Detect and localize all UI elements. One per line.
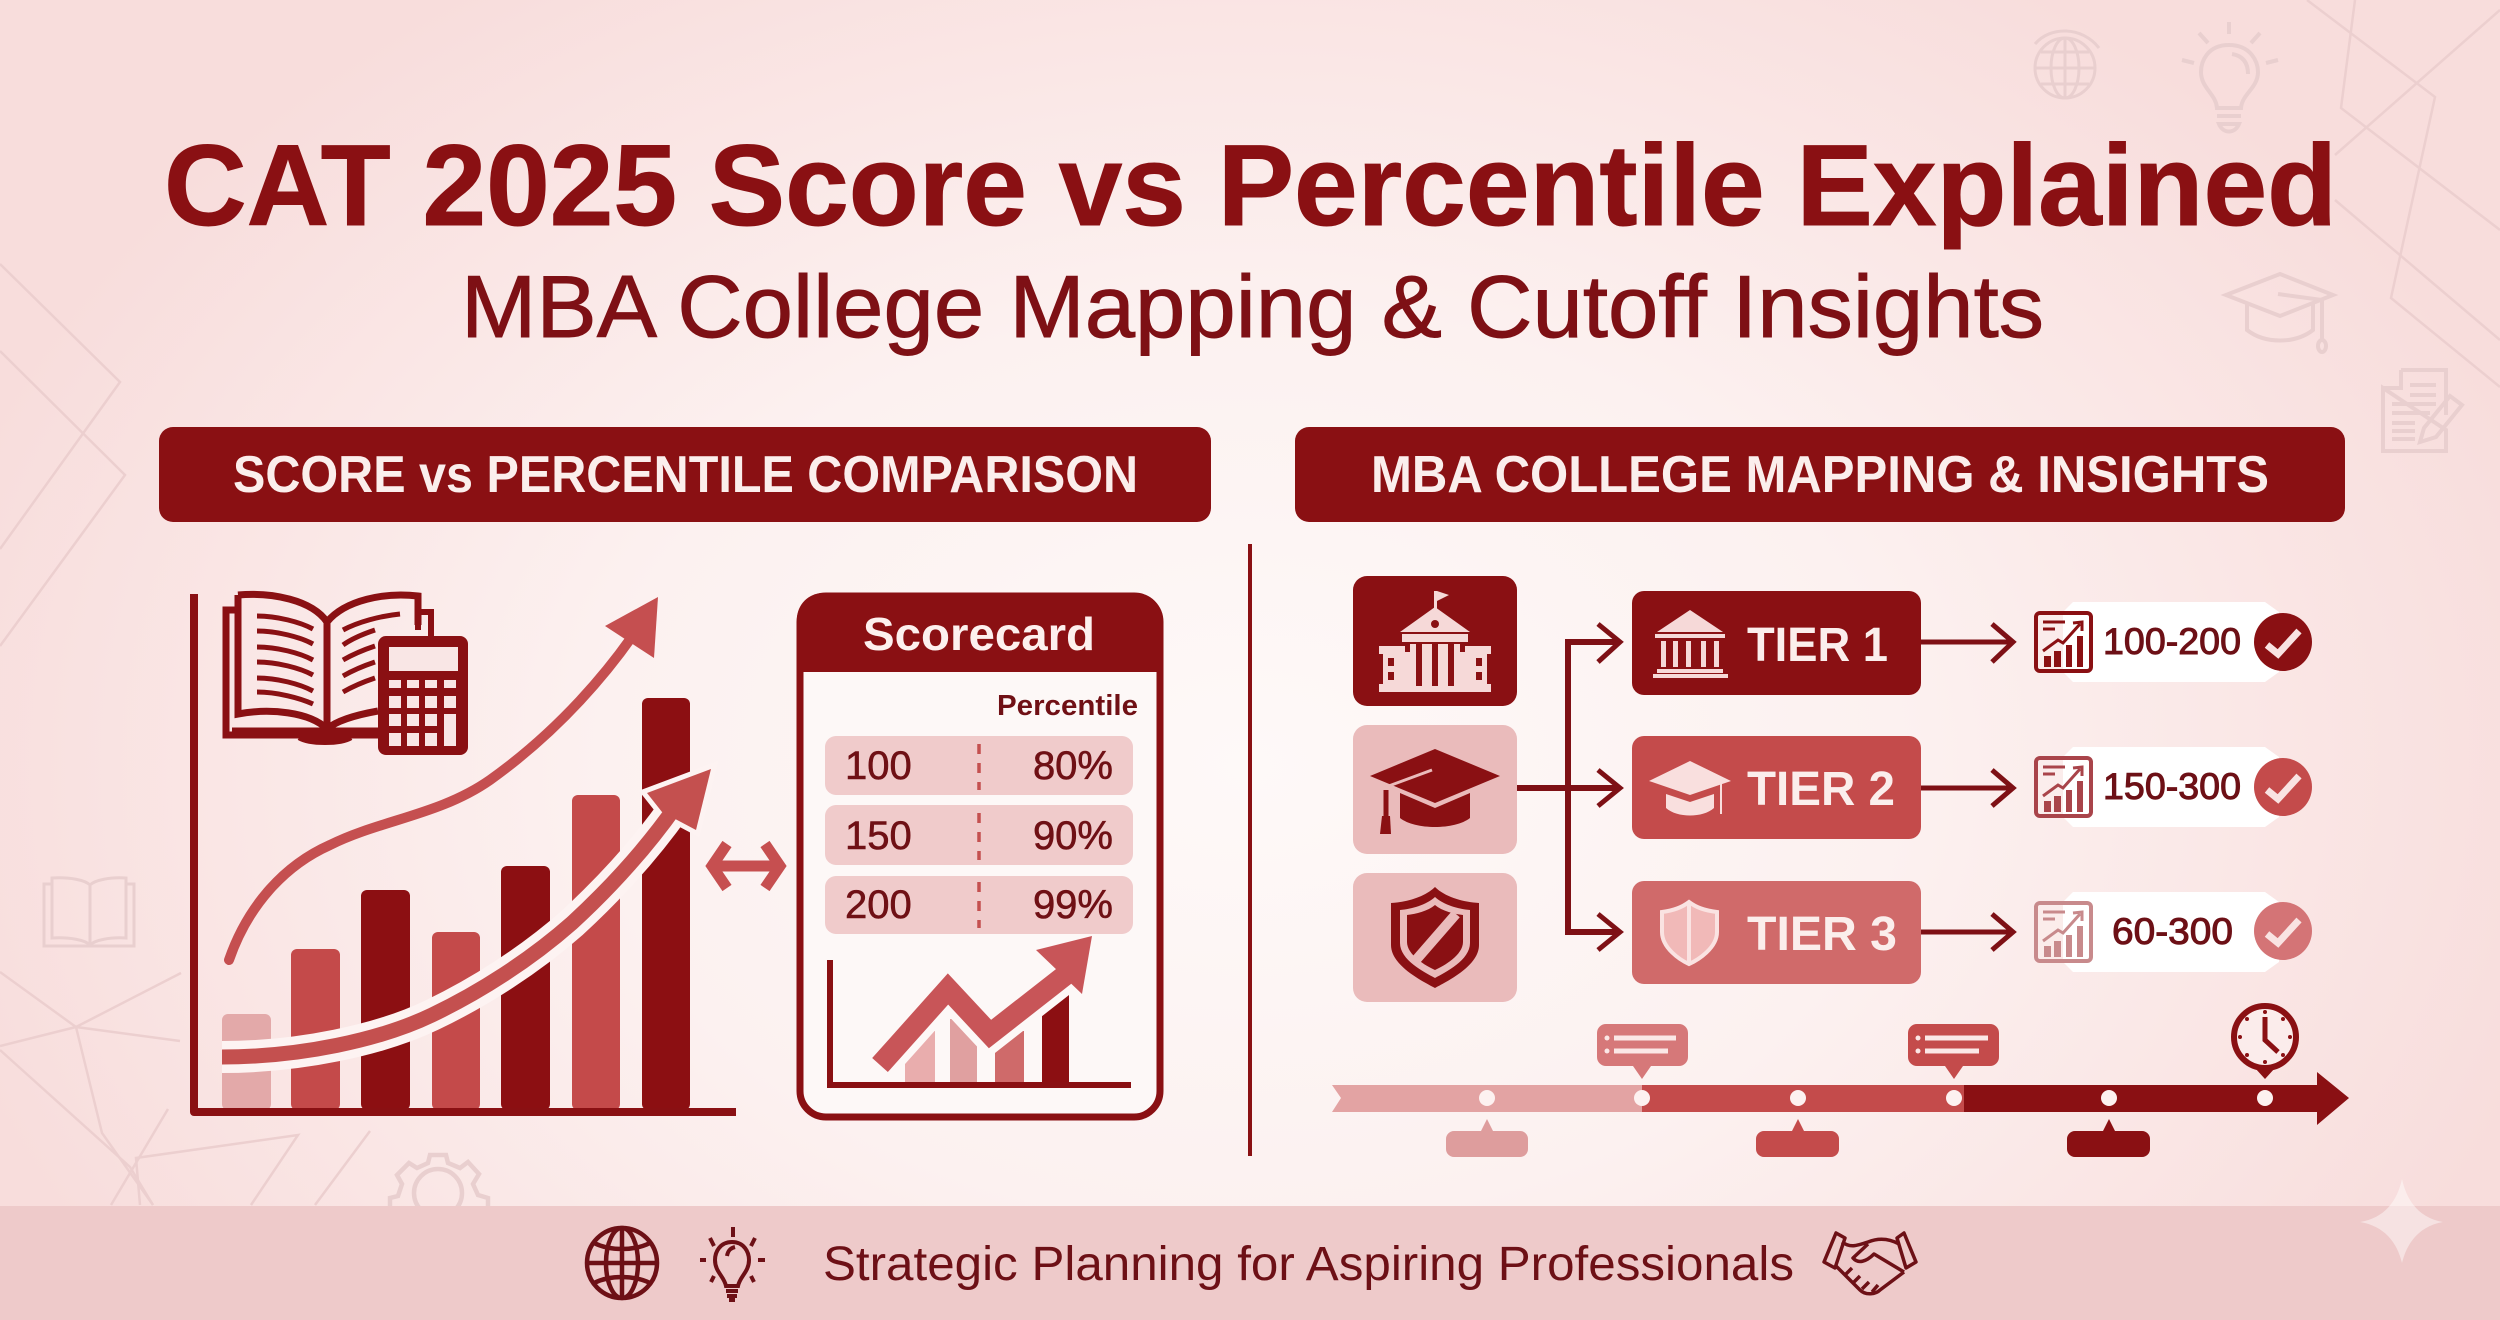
range row: tier 2: 150-300 <box>2103 766 2241 807</box>
timeline marker: dark lower <box>2067 1119 2150 1157</box>
icon tile: graduation cap <box>1353 725 1517 854</box>
mini trend chart <box>830 936 1131 1085</box>
faint icon: open book <box>44 878 134 946</box>
bar chart <box>222 698 690 1110</box>
row: 150 to 90%: 150 <box>845 814 912 858</box>
decorative sparkle <box>2360 1179 2443 1263</box>
timeline callout: mid upper <box>1908 1024 1999 1079</box>
icon: handshake <box>1824 1233 1916 1294</box>
row: 200 to 99%: 99% <box>1033 883 1113 927</box>
icon: check <box>2254 613 2312 671</box>
icon: open book <box>226 594 431 740</box>
column label: Percentile <box>997 690 1138 722</box>
range row: tier 2 <box>2036 747 2312 827</box>
icon: footer globe <box>587 1228 657 1298</box>
faint icon: globe <box>2035 31 2099 98</box>
arrow: double-headed comparison <box>712 844 780 888</box>
faint icon: document with pencil <box>2383 370 2462 451</box>
panel: MBA college mapping <box>1353 576 2312 1002</box>
tier 2 box <box>1632 736 1921 839</box>
icon: bank <box>1653 610 1728 678</box>
timeline arrow <box>1332 1072 2349 1125</box>
row: 150 to 90% <box>825 805 1133 865</box>
scorecard header <box>797 593 1162 672</box>
timeline marker: mid lower <box>1756 1119 1839 1157</box>
icon: check <box>2254 758 2312 816</box>
arrow: upper growth curve <box>229 597 658 960</box>
title: CAT 2025 Score vs Percentile Explained <box>164 122 2337 250</box>
heading: MBA college mapping and insights: MBA COLLEGE MAPPING & INSIGHTS <box>1371 446 2269 504</box>
panel: scorecard <box>797 593 1162 1117</box>
timeline marker: light lower <box>1446 1119 1528 1157</box>
range row: tier 3 <box>2036 892 2312 972</box>
icon: mini chart <box>2036 758 2091 816</box>
timeline callout: light upper <box>1597 1024 1688 1079</box>
footer band <box>0 1206 2500 1320</box>
icon tile: shield <box>1353 873 1517 1002</box>
icon: clock <box>2234 1006 2296 1079</box>
subtitle: MBA College Mapping & Cutoff Insights <box>461 257 2044 356</box>
icon: mini chart <box>2036 613 2091 671</box>
faint icon: gear <box>390 1155 488 1217</box>
tier 3 box: TIER 3 <box>1747 908 1897 961</box>
panel: score vs percentile chart <box>194 594 736 1112</box>
icon: outlined shield <box>1662 902 1717 964</box>
heading: score vs percentile comparison: SCORE vs PERCENTILE COMPARISON <box>233 446 1138 504</box>
arrows: tiers to ranges <box>1921 624 2013 950</box>
tier 1 box <box>1632 591 1921 695</box>
faint icon: graduation cap <box>2226 274 2333 352</box>
icon: calculator <box>378 636 468 755</box>
row: 100 to 80%: 100 <box>845 744 912 788</box>
scorecard header: Scorecard <box>863 608 1095 660</box>
row: 100 to 80%: 80% <box>1033 744 1113 788</box>
row: 200 to 99% <box>825 876 1133 934</box>
heading: score vs percentile comparison <box>159 427 1211 522</box>
row: 100 to 80% <box>825 736 1133 795</box>
icon: cap <box>1649 761 1731 816</box>
faint icon: light bulb <box>2182 22 2278 132</box>
row: 150 to 90%: 90% <box>1033 814 1113 858</box>
tier 2 box: TIER 2 <box>1747 763 1895 816</box>
icon: mini chart <box>2036 903 2091 961</box>
range row: tier 1 <box>2036 602 2312 682</box>
tier 1 box: TIER 1 <box>1747 619 1888 672</box>
heading: MBA college mapping and insights <box>1295 427 2345 522</box>
row: 200 to 99%: 200 <box>845 883 912 927</box>
range row: tier 3: 60-300 <box>2112 911 2233 952</box>
arrow: lower growth curve <box>222 769 711 1057</box>
footer tagline: Strategic Planning for Aspiring Professionals <box>823 1238 1794 1291</box>
icon: check <box>2254 902 2312 960</box>
arrows: tile to tiers <box>1517 624 1620 950</box>
chart axes <box>194 594 736 1112</box>
tier 3 box <box>1632 881 1921 984</box>
icon: footer light bulb <box>700 1227 765 1300</box>
range row: tier 1: 100-200 <box>2103 621 2241 662</box>
icon tile: college building <box>1353 576 1517 706</box>
